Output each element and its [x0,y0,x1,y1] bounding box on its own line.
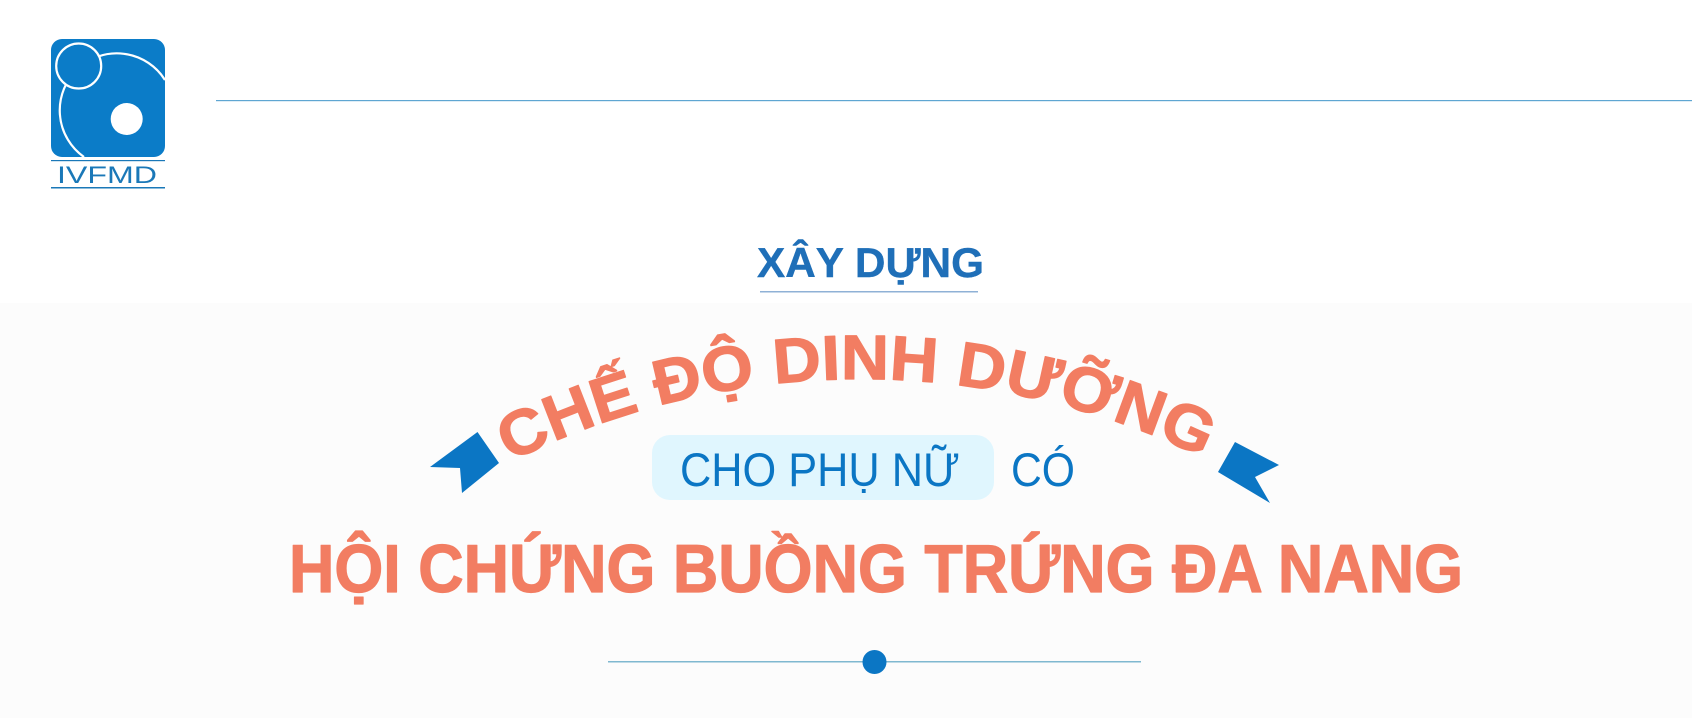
heading: XÂY DỰNG: XÂY DỰNG [757,238,984,286]
subtitle: CÓ: CÓ [1011,443,1075,496]
logo: IVFMD: IVFMD [57,162,157,189]
curved title: CHẾ ĐỘ DINH DƯỠNG: CHẾ ĐỘ DINH DƯỠNG [500,333,1213,455]
subtitle pill: CHO PHỤ NỮ: CHO PHỤ NỮ [680,443,960,496]
logo: IVFMD [51,39,165,189]
icon: left ribbon flag [430,432,499,493]
icon: right ribbon flag [1218,442,1279,503]
main title: HỘI CHỨNG BUỒNG TRỨNG ĐA NANG: HỘI CHỨNG BUỒNG TRỨNG ĐA NANG [289,530,1463,607]
divider with dot [608,650,1141,674]
